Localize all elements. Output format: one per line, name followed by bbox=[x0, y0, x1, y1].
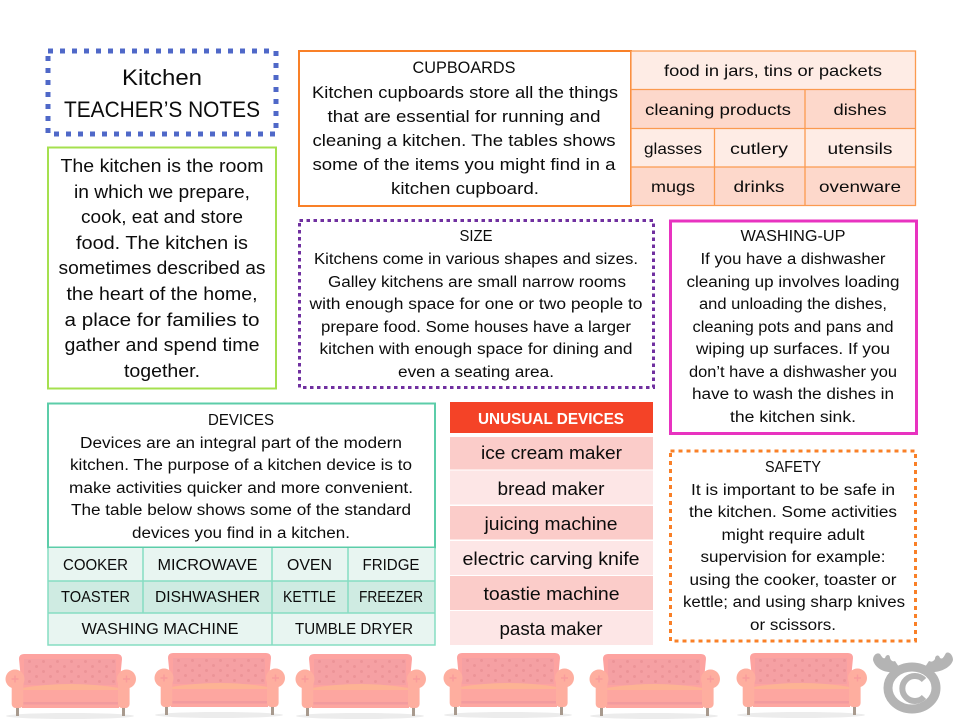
panel: washing-up: don’t have a dishwasher you bbox=[689, 364, 897, 381]
panel: cupboards: some of the items you might find in a bbox=[312, 156, 616, 174]
panel: safety: using the cooker, toaster or bbox=[690, 572, 896, 589]
panel: introduction: in which we prepare, bbox=[74, 182, 250, 202]
panel: cupboards: cleaning a kitchen. The tables shows bbox=[312, 132, 616, 150]
panel: size: Galley kitchens are small narrow rooms bbox=[328, 274, 626, 291]
panel: washing-up: cleaning pots and pans and bbox=[692, 319, 894, 336]
panel: cupboards: kitchen cupboard. bbox=[391, 180, 539, 198]
panel: devices: make activities quicker and more convenient. bbox=[69, 480, 413, 497]
panel: size: with enough space for one or two people to bbox=[308, 296, 642, 313]
panel: washing-up: cleaning up involves loading bbox=[686, 274, 900, 291]
panel: size: prepare food. Some houses have a larger bbox=[321, 319, 631, 336]
table: standard devices: WASHING MACHINE bbox=[82, 621, 238, 638]
title text: TEACHER’S NOTES bbox=[64, 97, 260, 122]
panel: size: kitchen with enough space for dining and bbox=[320, 341, 632, 358]
table: cupboard items: cutlery bbox=[730, 141, 788, 158]
panel: size bbox=[300, 220, 654, 388]
panel: introduction: gather and spend time bbox=[64, 335, 260, 355]
panel: devices bbox=[48, 404, 435, 548]
table: unusual devices: UNUSUAL DEVICES bbox=[478, 411, 624, 428]
table: cupboard items bbox=[631, 51, 916, 206]
table: cupboard items: food in jars, tins or packets bbox=[664, 63, 882, 80]
table: standard devices: KETTLE bbox=[283, 589, 336, 606]
table: standard devices: FRIDGE bbox=[362, 557, 420, 574]
panel: washing-up: If you have a dishwasher bbox=[700, 251, 886, 268]
table: cupboard items: cleaning products bbox=[645, 102, 791, 119]
table: standard devices: TUMBLE DRYER bbox=[295, 621, 413, 638]
icon: moose copyright logo bbox=[873, 652, 953, 709]
panel: cupboards: CUPBOARDS bbox=[412, 59, 516, 77]
panel: safety bbox=[670, 451, 916, 641]
panel: devices: DEVICES bbox=[208, 412, 274, 429]
icon: sofa row bbox=[6, 653, 867, 719]
panel: safety: It is important to be safe in bbox=[691, 482, 895, 499]
panel: introduction: sometimes described as bbox=[58, 258, 266, 278]
panel: size: Kitchens come in various shapes and sizes. bbox=[314, 251, 638, 268]
table: cupboard items: mugs bbox=[651, 179, 695, 196]
table: unusual devices bbox=[450, 402, 653, 645]
title text bbox=[64, 65, 260, 122]
panel: introduction: together. bbox=[124, 361, 200, 381]
panel: size: even a seating area. bbox=[398, 364, 554, 381]
panel: introduction bbox=[48, 148, 276, 388]
table: unusual devices: bread maker bbox=[498, 479, 604, 499]
table: standard devices: FREEZER bbox=[359, 589, 423, 606]
title text: Kitchen bbox=[122, 65, 202, 90]
panel: cupboards: Kitchen cupboards store all the things bbox=[312, 84, 618, 102]
panel: safety: might require adult bbox=[722, 527, 865, 544]
table: cupboard items: glasses bbox=[644, 141, 702, 158]
panel: devices: The table below shows some of the standard bbox=[71, 502, 411, 519]
table: unusual devices: toastie machine bbox=[484, 584, 620, 604]
panel: washing-up: have to wash the dishes in bbox=[692, 386, 894, 403]
panel: devices: Devices are an integral part of the modern bbox=[80, 435, 402, 452]
table: unusual devices: ice cream maker bbox=[481, 443, 622, 463]
table: unusual devices: juicing machine bbox=[483, 514, 618, 534]
panel: washing-up: WASHING-UP bbox=[740, 228, 846, 245]
table: cupboard items: dishes bbox=[834, 102, 886, 119]
panel: introduction: food. The kitchen is bbox=[76, 233, 248, 253]
table: standard devices: MICROWAVE bbox=[158, 557, 258, 574]
panel: washing-up: the kitchen sink. bbox=[730, 409, 856, 426]
panel: introduction: cook, eat and store bbox=[81, 207, 243, 227]
table: standard devices bbox=[48, 548, 435, 645]
panel: safety: the kitchen. Some activities bbox=[689, 504, 897, 521]
panel: washing-up: wiping up surfaces. If you bbox=[695, 341, 890, 358]
table: cupboard items: ovenware bbox=[819, 179, 901, 196]
table: cupboard items: utensils bbox=[828, 141, 892, 158]
table: unusual devices: electric carving knife bbox=[462, 549, 640, 569]
panel: safety: supervision for example: bbox=[700, 549, 886, 566]
panel: cupboards: that are essential for running and bbox=[328, 108, 600, 126]
panel: introduction: the heart of the home, bbox=[66, 284, 258, 304]
table: cupboard items: drinks bbox=[734, 179, 784, 196]
panel: introduction: a place for families to bbox=[64, 310, 260, 330]
table: standard devices: COOKER bbox=[63, 557, 128, 574]
title box bbox=[48, 51, 276, 134]
panel: washing-up: and unloading the dishes, bbox=[699, 296, 887, 313]
panel: cupboards bbox=[299, 51, 631, 206]
panel: size: SIZE bbox=[460, 228, 492, 245]
panel: safety: or scissors. bbox=[750, 617, 836, 634]
panel: devices: kitchen. The purpose of a kitchen device is to bbox=[70, 457, 412, 474]
panel: devices: devices you find in a kitchen. bbox=[132, 525, 350, 542]
table: standard devices: OVEN bbox=[287, 557, 332, 574]
table: unusual devices: pasta maker bbox=[500, 619, 603, 639]
panel: introduction: The kitchen is the room bbox=[60, 156, 264, 176]
table: standard devices: DISHWASHER bbox=[155, 589, 260, 606]
panel: washing-up bbox=[670, 221, 916, 434]
panel: safety: SAFETY bbox=[765, 459, 821, 476]
table: standard devices: TOASTER bbox=[61, 589, 130, 606]
panel: safety: kettle; and using sharp knives bbox=[683, 594, 905, 611]
